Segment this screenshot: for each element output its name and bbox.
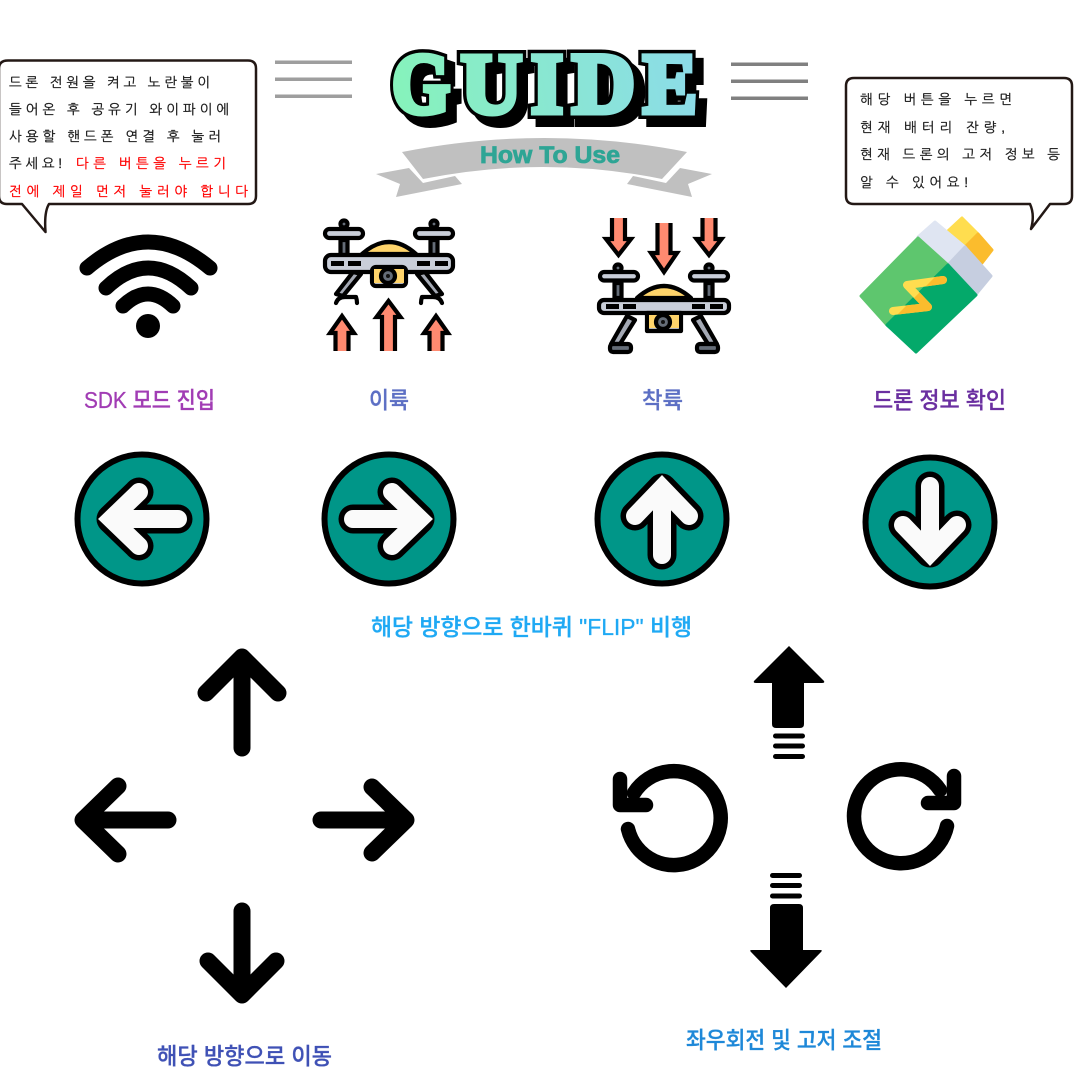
button: left flip xyxy=(78,454,206,584)
banner: How To Use xyxy=(376,138,712,197)
label: move: 해당 방향으로 이동 xyxy=(157,1043,332,1069)
callout: left speech bubble: 드론 전원을 켜고 노란불이 xyxy=(9,75,210,90)
button: right flip xyxy=(324,454,454,584)
label: rotate and altitude: 좌우회전 및 고저 조절 xyxy=(686,1027,882,1053)
callout: right speech bubble: 해당 버튼을 누르면 xyxy=(860,92,1012,107)
title: D xyxy=(572,36,635,132)
callout: left speech bubble: 전에 제일 먼저 눌러야 합니다 xyxy=(9,184,248,199)
icon: rotate left xyxy=(620,771,721,865)
callout: left speech bubble xyxy=(0,60,256,232)
button: back flip xyxy=(866,458,994,586)
title: I xyxy=(531,36,563,132)
icon: drone take-off xyxy=(325,220,453,351)
title: I xyxy=(539,44,571,140)
title: D xyxy=(572,36,635,132)
label: landing: 착륙 xyxy=(642,387,683,413)
icon: wifi xyxy=(87,242,210,338)
icon: battery xyxy=(861,218,992,352)
title: D xyxy=(580,44,643,140)
label: SDK mode: SDK 모드 진입 xyxy=(84,387,215,413)
title: U xyxy=(461,36,522,132)
decorative lines: right xyxy=(731,62,808,100)
label: flip: 해당 방향으로 한바퀴 "FLIP" 비행 xyxy=(371,614,692,640)
label: drone info: 드론 정보 확인 xyxy=(873,387,1006,413)
title: E xyxy=(651,44,705,140)
callout: left speech bubble: 들어온 후 공유기 와이파이에 xyxy=(9,102,229,117)
title: I xyxy=(531,36,563,132)
callout: right speech bubble: 알 수 있어요! xyxy=(860,175,968,190)
title xyxy=(392,36,705,140)
button: forward flip xyxy=(598,454,726,584)
title: E xyxy=(643,36,697,132)
banner: How To Use: How To Use xyxy=(480,142,620,169)
icon: move left arrow xyxy=(83,786,168,854)
icon: drone landing xyxy=(599,218,729,352)
title: E xyxy=(643,36,697,132)
title: G xyxy=(400,44,458,140)
title: U xyxy=(469,44,530,140)
icon: move right arrow xyxy=(321,787,406,853)
label: take-off: 이륙 xyxy=(369,387,409,413)
icon: rotate right xyxy=(854,769,954,863)
callout: right speech bubble: 현재 배터리 잔량, xyxy=(860,120,1005,135)
callout: right speech bubble xyxy=(846,78,1072,229)
icon: altitude down xyxy=(750,873,822,988)
callout: right speech bubble: 현재 드론의 고저 정보 등 xyxy=(860,147,1060,162)
title: G xyxy=(392,36,450,132)
decorative lines: left xyxy=(275,60,352,98)
callout: left speech bubble: 주세요! xyxy=(9,156,62,171)
icon: move up arrow xyxy=(206,657,278,748)
icon: altitude up xyxy=(754,646,824,759)
title: G xyxy=(392,36,450,132)
callout: left speech bubble: 사용할 핸드폰 연결 후 눌러 xyxy=(9,129,221,144)
title: U xyxy=(461,36,522,132)
icon: move down arrow xyxy=(208,911,276,995)
callout: left speech bubble: 다른 버튼을 누르기 xyxy=(76,156,226,171)
